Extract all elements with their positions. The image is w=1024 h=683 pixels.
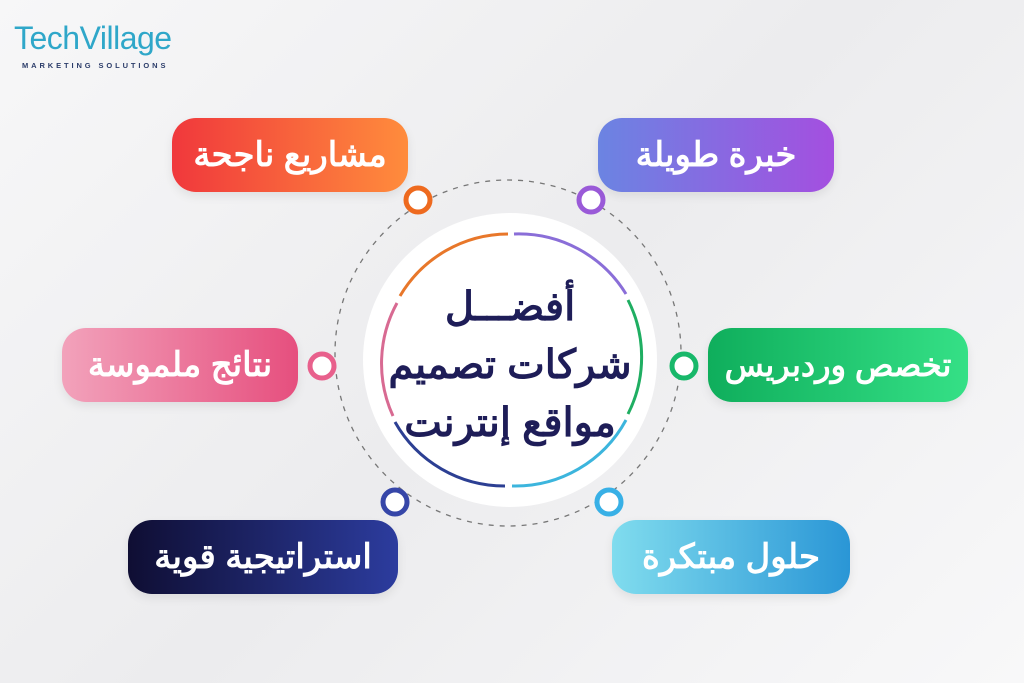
pill: tangible results: نتائج ملموسة (88, 346, 272, 384)
center title: شركات تصميم (388, 343, 632, 387)
pill: strong strategy (128, 520, 398, 594)
pill: long experience: خبرة طويلة (636, 136, 796, 174)
center title: مواقع إنترنت (404, 401, 616, 445)
pill: successful projects: مشاريع ناجحة (193, 136, 387, 174)
pill: strong strategy: استراتيجية قوية (154, 538, 372, 576)
center title: أفضـــل (445, 285, 575, 329)
pill: tangible results (62, 328, 298, 402)
center title (388, 279, 632, 446)
pill: innovative solutions (612, 520, 850, 594)
pill: wordpress: تخصص وردبريس (725, 347, 951, 383)
logo: MARKETING SOLUTIONS (22, 61, 168, 70)
pill: long experience (598, 118, 834, 192)
logo: TechVillage (14, 20, 172, 56)
pill: successful projects (172, 118, 408, 192)
pill: wordpress (708, 328, 968, 402)
pill: innovative solutions: حلول مبتكرة (642, 538, 820, 576)
